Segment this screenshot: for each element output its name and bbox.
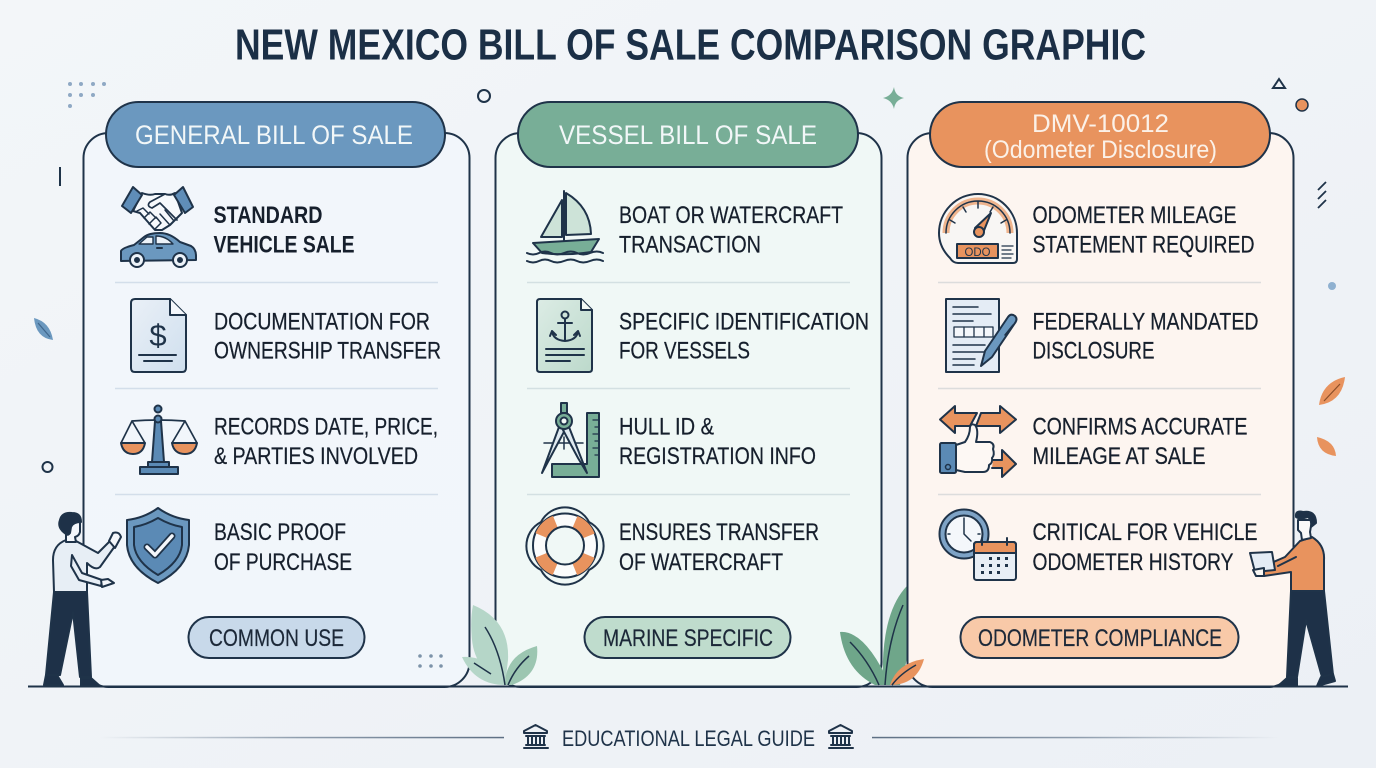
badge: odometer compliance [960, 617, 1238, 658]
icon: odometer gauge [939, 194, 1017, 263]
icon: handshake and car [121, 187, 196, 267]
text: hull id [619, 414, 816, 470]
decorative dots top left [68, 82, 106, 108]
icon: dollar document [131, 299, 186, 372]
icon: scales [121, 406, 197, 474]
heading pill: GENERAL BILL OF SALE [135, 120, 413, 150]
card background [908, 133, 1294, 687]
heading pill: VESSEL BILL OF SALE [559, 120, 817, 150]
figure: man holding tablet [1250, 512, 1335, 686]
text: odometer mileage [1032, 202, 1254, 258]
footer [100, 725, 1280, 751]
text: federally mandated [1032, 308, 1258, 364]
icon: odometer gauge: ODO [964, 245, 990, 259]
text: basic proof: BASIC PROOF [214, 519, 346, 546]
text: records: RECORDS DATE, PRICE, [214, 414, 438, 440]
text: odometer mileage: ODOMETER MILEAGE [1032, 202, 1236, 229]
plant: right green leaves [840, 583, 911, 685]
text: identification: SPECIFIC IDENTIFICATION [619, 308, 869, 336]
icon: courthouse left [524, 725, 548, 748]
text: critical: ODOMETER HISTORY [1032, 549, 1234, 576]
text: confirms accurate: MILEAGE AT SALE [1032, 443, 1206, 470]
text: standard vehicle sale: STANDARD [214, 202, 322, 229]
figure: man gesturing left [44, 513, 121, 686]
icon: compass and ruler [542, 403, 599, 477]
badge: odometer compliance: ODOMETER COMPLIANCE [978, 625, 1222, 652]
heading pill [106, 102, 445, 167]
badge: common use [188, 617, 364, 658]
card background [496, 133, 882, 687]
ground line [28, 686, 1348, 688]
text: standard vehicle sale [214, 202, 354, 258]
text: standard vehicle sale: VEHICLE SALE [214, 232, 354, 258]
text: critical [1032, 519, 1258, 576]
title: NEW MEXICO BILL OF SALE COMPARISON GRAPHIC [235, 20, 1146, 70]
heading pill [518, 102, 858, 167]
icon: shield [127, 508, 189, 583]
card background [84, 133, 470, 687]
heading pill: (Odometer Disclosure) [984, 136, 1217, 164]
text: documentation: DOCUMENTATION FOR [214, 308, 430, 336]
text: documentation: OWNERSHIP TRANSFER [214, 338, 441, 364]
text: boat: BOAT OR WATERCRAFT [619, 202, 843, 229]
decorative shapes [34, 79, 1345, 472]
text: hull id: HULL ID & [619, 414, 714, 440]
dots [418, 654, 443, 668]
text: confirms accurate [1032, 414, 1248, 470]
panel: DMV-10012 [908, 102, 1294, 687]
text: records: & PARTIES INVOLVED [214, 443, 418, 470]
footer label: EDUCATIONAL LEGAL GUIDE [562, 726, 815, 751]
heading pill: DMV-10012 [1032, 110, 1169, 138]
text: documentation [214, 308, 441, 364]
text: ensures transfer: ENSURES TRANSFER [619, 519, 819, 546]
badge: marine specific: MARINE SPECIFIC [603, 625, 773, 652]
icon: courthouse right [829, 725, 853, 748]
text: identification [619, 308, 869, 364]
badge: common use: COMMON USE [209, 625, 344, 652]
panel: general bill of sale [84, 102, 470, 687]
panel: vessel bill of sale [496, 102, 882, 687]
text: boat: TRANSACTION [619, 232, 761, 258]
icon: clock and calendar [940, 510, 1016, 580]
icon: dollar document: $ [149, 318, 167, 353]
text: boat [619, 202, 843, 258]
icon: form and pen [946, 299, 1016, 372]
text: basic proof [214, 519, 352, 576]
badge: marine specific [584, 617, 790, 658]
text: critical: CRITICAL FOR VEHICLE [1032, 519, 1258, 546]
plant: orange leaf [890, 659, 924, 685]
text: identification: FOR VESSELS [619, 338, 750, 364]
text: hull id: REGISTRATION INFO [619, 443, 816, 470]
text: basic proof: OF PURCHASE [214, 549, 352, 576]
text: records [214, 414, 438, 470]
text: ensures transfer: OF WATERCRAFT [619, 549, 783, 576]
icon: sailboat [527, 191, 603, 262]
text: federally mandated: DISCLOSURE [1032, 338, 1154, 364]
text: confirms accurate: CONFIRMS ACCURATE [1032, 414, 1248, 440]
icon: anchor document [537, 299, 592, 372]
text: ensures transfer [619, 519, 819, 576]
text: odometer mileage: STATEMENT REQUIRED [1032, 232, 1254, 258]
icon: life ring [526, 507, 604, 585]
plant: left [462, 605, 537, 685]
icon: arrows and thumbs up [940, 406, 1016, 477]
text: federally mandated: FEDERALLY MANDATED [1032, 308, 1258, 336]
heading pill [930, 102, 1270, 167]
